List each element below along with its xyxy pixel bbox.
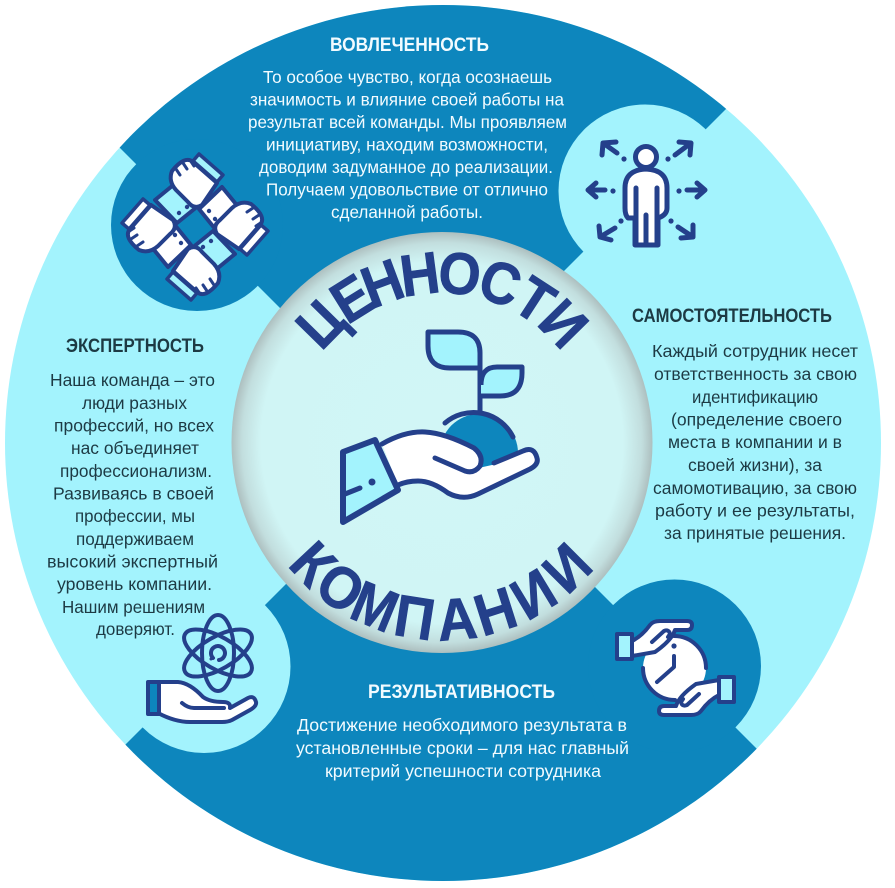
heading: КОМПАНИИ: И bbox=[530, 531, 605, 606]
text block: самостоятельность: идентификацию bbox=[692, 387, 818, 407]
heading: КОМПАНИИ: И bbox=[500, 556, 568, 633]
text block: экспертность: нас объединяет bbox=[71, 438, 199, 458]
text block: результативность: установленные сроки – для нас главный bbox=[296, 738, 629, 758]
heading: ЦЕННОСТИ: И bbox=[526, 287, 600, 361]
heading: КОМПАНИИ: М bbox=[342, 568, 407, 645]
text block: вовлеченность: результат всей команды. Мы проявляем bbox=[248, 112, 567, 132]
text block: экспертность: Нашим решениям bbox=[62, 597, 205, 617]
heading: КОМПАНИИ: А bbox=[434, 585, 480, 654]
text block: самостоятельность: (определение своего bbox=[671, 410, 842, 430]
text block: вовлеченность: То особое чувство, когда осознаешь bbox=[263, 67, 552, 87]
text block: экспертность: доверяют. bbox=[96, 619, 175, 639]
heading: ЦЕННОСТИ: С bbox=[470, 246, 530, 321]
icon: hands around clock bbox=[617, 621, 734, 715]
text block: самостоятельность: САМОСТОЯТЕЛЬНОСТЬ bbox=[632, 305, 832, 327]
panel: central disc bbox=[232, 232, 652, 653]
icon: person with arrows bbox=[588, 142, 705, 245]
heading: ЦЕННОСТИ: Н bbox=[396, 240, 444, 310]
text block: самостоятельность: за принятые решения. bbox=[664, 523, 846, 543]
text block: самостоятельность: работу и ее результаты, bbox=[655, 500, 855, 520]
text block: самостоятельность: Каждый сотрудник несет bbox=[652, 341, 858, 361]
text block: самостоятельность: ответственность за свою bbox=[654, 364, 857, 384]
icon: four linked hands bbox=[122, 154, 268, 300]
text block: экспертность: Развиваясь в своей bbox=[53, 484, 214, 504]
heading: КОМПАНИИ: П bbox=[390, 583, 439, 654]
text block: вовлеченность: сделанной работы. bbox=[331, 202, 483, 222]
heading: КОМПАНИИ: К bbox=[277, 529, 349, 600]
text block: самостоятельность bbox=[632, 305, 858, 543]
text block: вовлеченность: инициативу, находим возможности, bbox=[266, 134, 548, 154]
heading: ЦЕННОСТИ: Е bbox=[320, 262, 385, 337]
heading: ЦЕННОСТИ: Ц bbox=[284, 287, 359, 361]
heading: КОМПАНИИ: О bbox=[304, 550, 376, 628]
text block: результативность: РЕЗУЛЬТАТИВНОСТЬ bbox=[368, 681, 555, 703]
text block: результативность: Достижение необходимого результата в bbox=[297, 715, 627, 735]
text block: экспертность: ЭКСПЕРТНОСТЬ bbox=[66, 335, 204, 357]
text block: экспертность: профессионализм. bbox=[60, 461, 212, 481]
text block: вовлеченность: Получаем удовольствие от отлично bbox=[266, 180, 548, 200]
text block: экспертность: Наша команда – это bbox=[50, 370, 215, 390]
heading: ЦЕННОСТИ: Т bbox=[502, 265, 566, 338]
text block: вовлеченность: доводим задуманное до реализации. bbox=[259, 157, 553, 177]
text block: вовлеченность bbox=[248, 34, 567, 222]
text block: экспертность bbox=[47, 335, 218, 639]
icon: atom over hand bbox=[148, 615, 259, 722]
text block: результативность bbox=[296, 681, 629, 781]
heading: ЦЕННОСТИ bbox=[284, 240, 600, 361]
text block: экспертность: профессии, мы bbox=[75, 506, 195, 526]
heading: ЦЕННОСТИ: Н bbox=[353, 247, 413, 322]
icon: hand holding sprout bbox=[343, 332, 537, 522]
text block: вовлеченность: ВОВЛЕЧЕННОСТЬ bbox=[330, 34, 489, 56]
text block: самостоятельность: самомотивацию, за свою bbox=[653, 478, 857, 498]
text block: экспертность: высокий экспертный bbox=[47, 552, 218, 572]
heading: КОМПАНИИ bbox=[277, 529, 605, 654]
heading: ЦЕННОСТИ: О bbox=[435, 240, 484, 309]
text block: вовлеченность: значимость и влияние своей работы на bbox=[250, 90, 564, 110]
text block: экспертность: люди разных bbox=[82, 393, 187, 413]
heading: КОМПАНИИ: Н bbox=[467, 575, 525, 650]
text block: экспертность: профессий, но всех bbox=[54, 416, 214, 436]
text block: самостоятельность: своей жизни), за bbox=[688, 455, 822, 475]
text block: результативность: критерий успешности сотрудника bbox=[325, 761, 601, 781]
text block: самостоятельность: места в компании и в bbox=[668, 432, 842, 452]
text block: экспертность: поддерживаем bbox=[76, 529, 194, 549]
text block: экспертность: уровень компании. bbox=[57, 574, 212, 594]
